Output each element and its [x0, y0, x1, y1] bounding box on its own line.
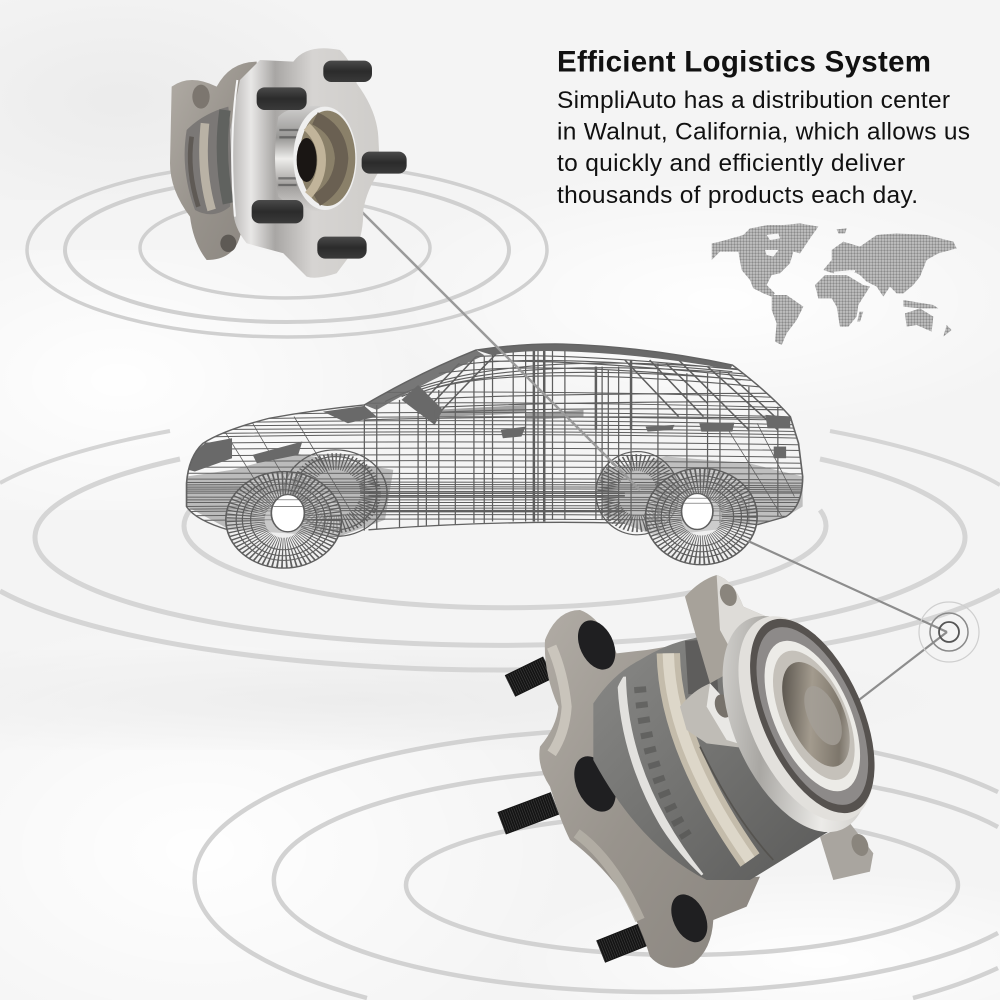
concentric rings: bottom hub — [195, 729, 998, 998]
threaded studs — [502, 667, 647, 952]
rear casting — [539, 610, 760, 968]
description text: in Walnut, California, which allows us — [557, 118, 970, 146]
description text: thousands of products each day. — [557, 182, 918, 209]
studs — [252, 61, 407, 259]
car outline — [187, 344, 803, 530]
front face — [693, 591, 905, 854]
mounting ears — [680, 575, 873, 880]
front wheel — [226, 450, 387, 568]
dotted world map — [712, 223, 957, 345]
description text — [557, 87, 970, 209]
description text: to quickly and efficiently deliver — [557, 150, 905, 177]
description text: SimpliAuto has a distribution center — [557, 87, 950, 114]
concentric rings: car — [0, 431, 1000, 670]
large wheel hub, bottom — [502, 575, 905, 968]
heading: Efficient Logistics System — [557, 46, 931, 78]
car body wireframe — [187, 347, 803, 533]
rear casting — [170, 62, 260, 260]
bolt heads — [566, 614, 715, 948]
connector line: top hub to target — [362, 212, 640, 490]
connector lines and target — [748, 541, 979, 703]
car dark details — [187, 344, 803, 536]
concentric rings: top hub — [27, 163, 547, 337]
flange plate — [230, 48, 380, 278]
target circles — [919, 602, 979, 662]
wireframe car — [187, 344, 803, 568]
housing bands — [622, 640, 773, 877]
bearing housing — [593, 623, 837, 880]
rear wheel — [596, 452, 757, 565]
small wheel hub, top — [170, 48, 407, 278]
barrel — [275, 106, 323, 212]
